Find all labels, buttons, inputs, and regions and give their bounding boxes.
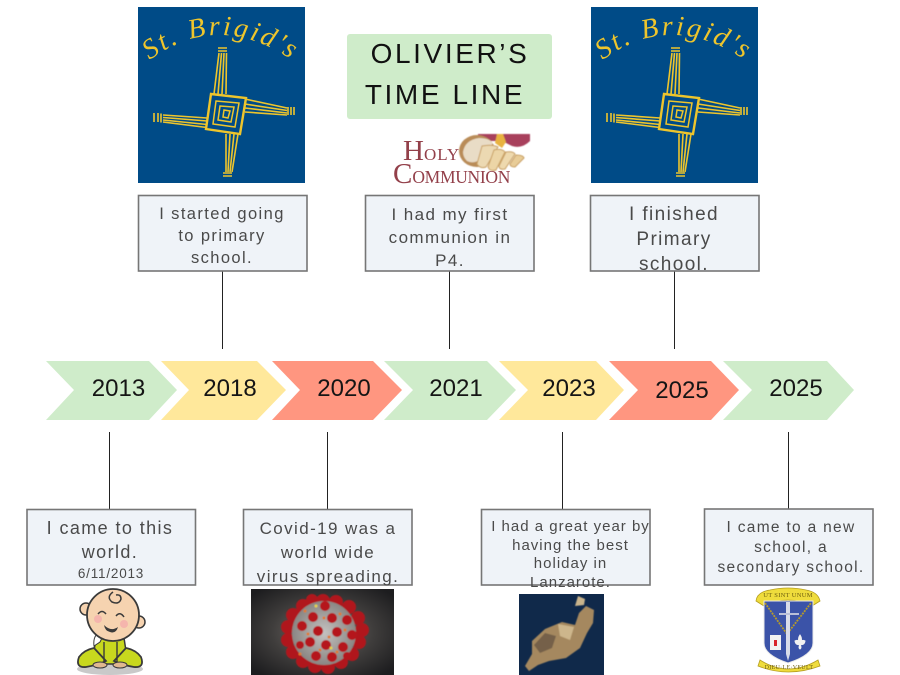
title: TIME LINE [365,79,525,110]
image: coronavirus [251,589,394,675]
box: new secondary school: I came to a new [727,519,855,536]
logo: St. Brigid's primary school (right) [591,7,758,183]
box: Covid-19: world wide [280,543,375,562]
box: holiday in Lanzarote: having the best [512,537,629,554]
box: first communion [366,196,534,271]
chevron: 2013: 2013 [92,375,145,402]
box: finished primary school: Primary [636,229,712,250]
title: OLIVIER’S [371,38,529,69]
box: Covid-19 [244,510,412,586]
chevron: 2025 green [723,361,854,420]
logo: St. Brigid's primary school (left): St. Brigid's [143,16,296,59]
icon: Holy Communion logo: COMMUNION [393,158,511,190]
icon: baby [77,589,145,675]
box: first communion: communion in [389,228,511,247]
chevron: 2018 [161,361,286,420]
chevron: 2020: 2020 [317,375,371,402]
box: first communion: P4. [435,251,465,270]
chevron: 2020 [272,361,402,420]
box: holiday in Lanzarote: Lanzarote. [530,574,611,591]
box: finished primary school: school. [639,254,709,275]
chevron: 2025 red: 2025 [655,377,709,404]
chevron: 2023: 2023 [542,375,596,402]
box: holiday in Lanzarote: I had a great year by [491,518,650,535]
box: started primary school [138,196,307,271]
chevron: 2021: 2021 [429,375,483,402]
box: came to this world [27,510,196,585]
box: first communion: I had my first [392,205,508,224]
chevron: 2025 green: 2025 [769,375,823,402]
box: came to this world: I came to this [47,518,173,538]
chevron: 2025 red [609,361,739,420]
box: finished primary school: I finished [629,204,719,225]
box: Covid-19: virus spreading. [257,567,399,586]
logo: St. Brigid's primary school (left) [138,7,305,183]
chevron: 2021 [384,361,516,420]
image: satellite view of Lanzarote [519,594,604,675]
box: holiday in Lanzarote [482,510,650,591]
box: started primary school: I started going [159,205,285,223]
box: came to this world: 6/11/2013 [78,566,144,581]
chevron: 2018: 2018 [203,375,257,402]
box: started primary school: school. [191,249,253,267]
logo: secondary school crest [756,588,820,672]
chevron: 2023 [499,361,624,420]
icon: Holy Communion logo [393,134,530,190]
icon: Holy Communion logo: HOLY [403,135,460,167]
box: holiday in Lanzarote: holiday in [534,555,607,572]
logo: secondary school crest: DIEU·LE·VEULT [765,665,813,671]
box: new secondary school: secondary school. [717,559,865,576]
box: Covid-19: Covid-19 was a [260,519,396,538]
box: finished primary school [590,196,759,275]
logo: St. Brigid's primary school (right): St. Brigid's [596,16,750,59]
connector lines [110,271,788,509]
chevron: 2013 [46,361,177,420]
box: new secondary school: school, a [754,539,828,556]
box: new secondary school [704,509,873,585]
logo: secondary school crest: UT SINT UNUM [763,592,813,599]
box: started primary school: to primary [178,227,266,245]
box: came to this world: world. [81,542,138,562]
timeline chevrons [46,361,854,420]
title [347,34,552,119]
